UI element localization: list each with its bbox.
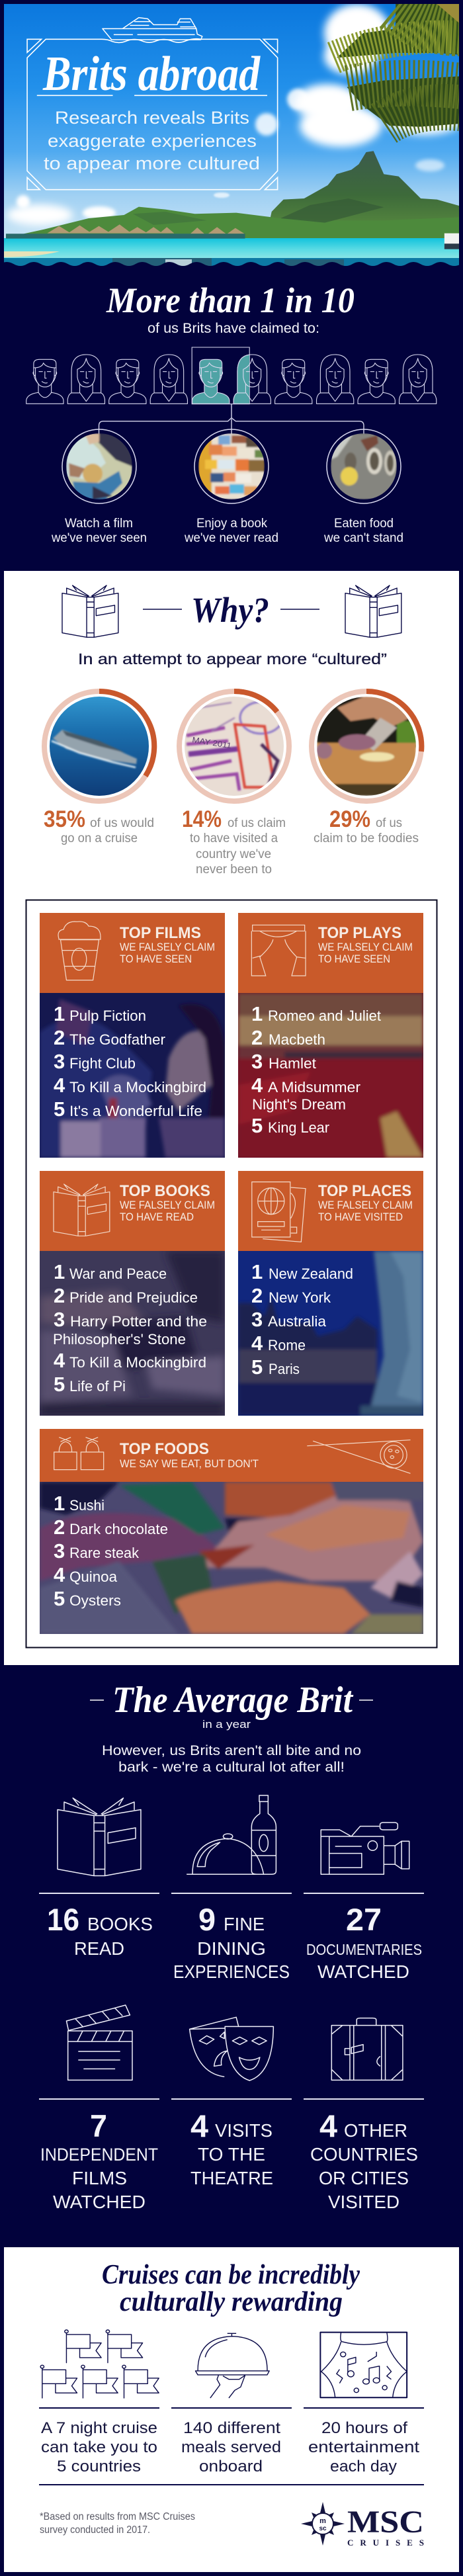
list: places: Australia [268,1313,327,1330]
fact: entertainment: entertainment [308,2438,419,2456]
heading: More than 1 in 10 [106,280,355,320]
list: books: Harry Potter and the [70,1313,207,1330]
list: books: To Kill a Mockingbird [69,1354,206,1371]
photo: person reading [40,1251,225,1416]
icon: dining cloche and wine [187,1795,276,1874]
list: books [53,1260,207,1396]
card heading: WE FALSELY CLAIM [120,941,215,953]
heading: Cruises can be incredibly [102,2260,360,2290]
stat text: 14% [182,806,286,877]
list: plays: Romeo and Juliet [268,1008,381,1024]
photo: cinema audience [40,993,225,1158]
stat: theatre visits: VISITS [215,2120,273,2141]
card heading: TO HAVE READ [120,1211,194,1223]
stat: independent films: 7 [90,2108,107,2143]
list: books: Life of Pi [69,1378,126,1395]
stat text: 35%: 35% [44,806,85,832]
dividers row two [39,2098,424,2100]
footnote: *Based on results from MSC Cruises [40,2511,195,2522]
photo: sushi [40,1482,423,1634]
list: plays: Macbeth [269,1031,325,1048]
stat: 35% cruise [44,691,154,801]
stat text: 29%: claim to be foodies [314,832,419,845]
icon: theatre curtain [251,925,306,976]
icon: chopsticks and sushi [307,1440,410,1473]
stat: documentaries: WATCHED [317,1961,409,1982]
list: films: 4 [54,1074,65,1097]
stat: 14% passport stamps: MAY 2011 [192,735,232,750]
stat: theatre visits: TO THE [198,2144,265,2165]
card heading: TOP FOODS [120,1440,209,1458]
stat: 29% foodies [312,691,421,801]
fact: countries: can take you to [41,2438,157,2456]
subheading: In an attempt to appear more “cultured” [78,650,387,667]
stat text: 14%: country we've [196,847,271,861]
card heading [318,1182,413,1223]
card: top places [238,1171,423,1416]
list: films: 5 [54,1097,65,1121]
card heading: WE FALSELY CLAIM [120,1199,215,1211]
card heading [120,1440,259,1470]
icon: video camera [321,1823,409,1874]
list: films: 3 [54,1050,65,1073]
card heading: WE SAY WE EAT, BUT DON'T [120,1458,259,1470]
card heading: TO HAVE VISITED [318,1211,403,1223]
caption: eaten food: we can't stand [323,531,403,545]
stat: independent films: FILMS [72,2168,127,2188]
caption: watch a film: we've never seen [51,531,147,545]
icon: clapperboard [66,2005,132,2080]
icon: stage with music notes [320,2333,407,2397]
stat: theatre visits: 4 [190,2108,208,2143]
list: foods: 3 [54,1539,65,1563]
people row [26,347,437,404]
list: books: 2 [54,1284,65,1307]
list: plays: Hamlet [269,1055,316,1072]
card heading [120,1182,215,1223]
list: films: 2 [54,1026,65,1049]
list: books: 4 [54,1349,65,1372]
icon: right book [345,585,401,637]
list: foods: 5 [54,1587,65,1610]
stat: fine dining: FINE [224,1914,265,1934]
title: Brits abroad [42,47,261,101]
subtitle: to appear more cultured [44,153,260,173]
overwater bungalows [6,224,462,249]
connector lines [99,404,364,435]
card heading: TOP FILMS [120,924,201,942]
icon: wrapped food bags [54,1438,104,1470]
stat text: 29%: of us [376,816,402,830]
intro text [102,1743,361,1775]
fact: meals: 140 different [183,2419,280,2437]
list: films [54,1002,206,1121]
photo: theatre auditorium [238,993,423,1158]
stat: books read: 16 [47,1902,79,1937]
panel: hero photo banner [0,4,463,278]
icon: cruise ship [103,18,202,40]
stat: fine dining: EXPERIENCES [173,1961,290,1982]
list: films: The Godfather [69,1031,165,1048]
stat: fine dining: DINING [197,1938,266,1959]
subtitle: Research reveals Brits [55,108,249,128]
list: films: It's a Wonderful Life [69,1103,202,1119]
clouds [7,4,463,226]
list: foods: Rare steak [69,1545,140,1561]
list: plays: 1 [251,1002,263,1025]
icon: serving cloche [196,2333,269,2398]
list: plays [251,1002,381,1137]
list: foods: Quinoa [69,1568,118,1585]
card heading: TO HAVE SEEN [318,953,390,965]
list: places: New Zealand [269,1266,353,1282]
photo: oysters [327,429,401,503]
stat: other countries: VISITED [328,2192,400,2212]
list: foods [54,1492,168,1610]
card heading: TO HAVE SEEN [120,953,192,965]
panel: the average brit [39,1680,424,2212]
list: foods: Oysters [69,1592,121,1609]
caption: enjoy a book: we've never read [184,531,278,545]
stat: other countries: OTHER [344,2120,407,2141]
list: films: To Kill a Mockingbird [69,1079,206,1095]
stat text: 29%: 29% [329,806,370,832]
subheading: in a year [202,1718,251,1731]
card heading: TOP PLAYS [318,924,401,942]
stat text: 14%: of us claim [228,816,286,830]
list: films: Fight Club [69,1055,136,1072]
list: places: New York [269,1289,331,1306]
card: top films [40,913,225,1158]
stat text: 35% [44,806,154,845]
icon: passport [252,1182,306,1242]
icon: popcorn [58,922,101,980]
photo: watching a film [62,429,136,503]
list: places: 4 [251,1332,263,1355]
icon: open book [54,1184,110,1236]
card heading: WE FALSELY CLAIM [318,941,413,953]
caption: watch a film: Watch a film [65,517,133,531]
photo: statue of liberty skyline [238,1251,423,1416]
stat: 14% passport stamps [179,691,289,801]
list: places: 2 [251,1284,263,1307]
fact: meals: meals served [181,2438,281,2456]
stat: documentaries: 27 [346,1902,382,1937]
dividers row one [39,1893,424,1894]
stat: fine dining: 9 [198,1902,216,1937]
intro text: However, us Brits aren't all bite and no [102,1743,361,1758]
panel: more than 1 in 10 [26,280,437,545]
stat text: 14%: never been to [196,863,272,877]
heading: culturally rewarding [120,2287,343,2317]
list: films: 1 [54,1002,65,1025]
stat: books read: BOOKS [87,1914,153,1934]
logo: MSC Cruises: sc [319,2525,327,2532]
stat text: 14%: 14% [182,806,222,832]
sky [4,4,459,242]
water [4,238,459,259]
fact: meals [181,2419,281,2475]
footnote [40,2511,195,2536]
stat: books read: READ [74,1938,124,1959]
list: places: Rome [268,1337,306,1353]
list: foods: 2 [54,1516,65,1539]
list: foods: Dark chocolate [69,1521,168,1537]
stat text: 35%: go on a cruise [61,832,138,845]
caption: watch a film [51,517,147,545]
stat: other countries [310,2108,418,2212]
icon: five flags [40,2330,159,2398]
subtitle: exaggerate experiences [48,131,257,151]
card: top foods [40,1429,423,1634]
list: plays: 3 [251,1050,263,1073]
stat: independent films: WATCHED [53,2192,146,2212]
wave edge [0,262,461,278]
list: places: Paris [269,1361,300,1377]
stat: theatre visits [190,2108,273,2188]
card heading: TOP PLACES [318,1182,411,1200]
stat: documentaries [306,1902,422,1982]
heading: why: Why? [191,590,269,630]
subtitle [44,108,260,173]
list: plays: 5 [251,1114,263,1137]
list: foods: Sushi [69,1497,105,1514]
caption: enjoy a book [184,517,278,545]
panel: cruises rewarding (white section) [4,2247,459,2572]
fact: countries: 5 countries [57,2458,141,2475]
list: plays: 4 [251,1074,263,1097]
logo: MSC Cruises [301,2502,424,2548]
list: places [251,1260,353,1379]
list: books: 1 [54,1260,65,1283]
fact: entertainment [308,2419,419,2475]
caption: enjoy a book: Enjoy a book [196,517,267,531]
stat: books read [47,1902,153,1959]
card: top books [40,1171,225,1416]
fact: entertainment: each day [330,2458,397,2475]
logo: MSC Cruises: m [319,2517,326,2525]
stat text: 29% [314,806,419,845]
icon: theatre masks [190,2017,273,2081]
stat: independent films [40,2108,158,2212]
caption: eaten food [323,517,403,545]
list: plays: A Midsummer [268,1079,360,1095]
list: plays: Night's Dream [252,1096,346,1113]
list: foods: 1 [54,1492,65,1515]
icon: book [58,1798,141,1876]
fact: countries [41,2419,157,2475]
list: books: War and Peace [69,1266,167,1282]
list: books: 5 [54,1373,65,1396]
dividers [39,2408,424,2485]
stat: other countries: 4 [319,2108,337,2143]
list: films: Pulp Fiction [69,1008,146,1024]
list: books: Philosopher's' Stone [53,1331,186,1348]
stat: fine dining [173,1902,290,1982]
caption: eaten food: Eaten food [334,517,394,531]
logo: MSC Cruises: CRUISES [347,2538,424,2548]
stat: other countries: COUNTRIES [310,2144,418,2165]
intro text: bark - we're a cultural lot after all! [118,1760,345,1775]
list: plays: King Lear [268,1119,329,1136]
list: places: 5 [251,1355,263,1379]
highlighted half figure [233,355,249,404]
card heading [120,924,215,965]
photo: books [194,429,269,503]
icon: suitcase [331,2018,403,2080]
fact: countries: A 7 night cruise [41,2419,157,2437]
heading: The Average Brit [112,1680,353,1721]
fact: meals: onboard [199,2458,263,2475]
list: foods: 4 [54,1563,65,1586]
heading [102,2260,360,2317]
stat: documentaries: DOCUMENTARIES [306,1941,422,1958]
panel: why (white section) [4,571,459,1665]
frame around top lists [26,900,437,1647]
title frame [27,39,278,190]
stat text: 14%: to have visited a [190,832,278,845]
list: places: 3 [251,1308,263,1331]
stat: theatre visits: THEATRE [190,2168,273,2188]
stat: independent films: INDEPENDENT [40,2145,158,2165]
palm tree [333,4,463,127]
card heading [318,924,413,965]
footnote: survey conducted in 2017. [40,2524,150,2536]
mountains [6,151,460,239]
fact: entertainment: 20 hours of [321,2419,407,2437]
card heading: TOP BOOKS [120,1182,210,1200]
list: books: 3 [54,1308,65,1331]
stat: other countries: OR CITIES [319,2168,409,2188]
icon: left book [62,585,118,637]
logo: MSC Cruises: MSC [347,2505,424,2540]
stat text: 35%: of us would [90,816,154,830]
list: places: 1 [251,1260,263,1283]
card: top plays [238,913,423,1158]
list: plays: 2 [251,1026,263,1049]
card heading: WE FALSELY CLAIM [318,1199,413,1211]
subheading: of us Brits have claimed to: [147,321,319,336]
list: books: Pride and Prejudice [69,1289,198,1306]
